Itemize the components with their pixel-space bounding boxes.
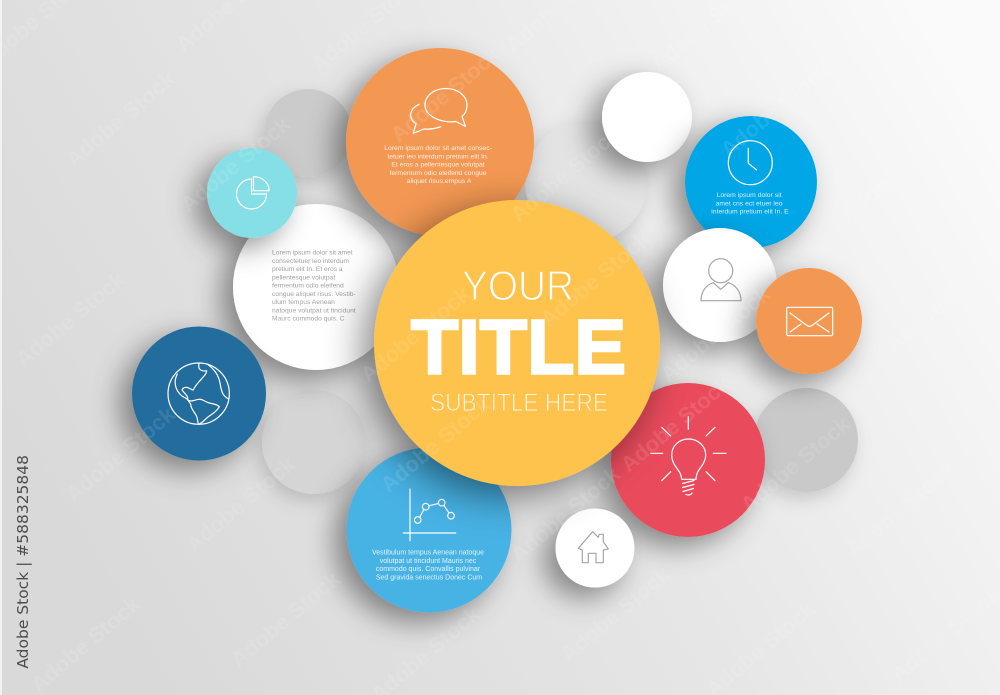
panel: red idea circle — [611, 383, 765, 537]
icon: speech bubbles — [411, 88, 467, 133]
watermark pattern: Adobe Stock — [181, 451, 300, 557]
paragraph text: Lorem ipsum dolor sit amet — [272, 250, 353, 256]
dark blue circle — [132, 326, 266, 460]
icon: light bulb — [651, 417, 726, 495]
teal circle — [207, 148, 297, 238]
paragraph text: Lorem ipsum dolor sit amet consec- — [384, 145, 492, 152]
paragraph text: commodo quis. Convallis pulvinar — [376, 566, 481, 573]
yellow circle — [374, 200, 660, 486]
white circle — [233, 204, 399, 370]
left edge strip — [0, 0, 2, 695]
watermark pattern: Adobe Stock — [61, 66, 180, 172]
icon: person — [701, 259, 741, 301]
icon: line chart — [403, 489, 456, 541]
watermark pattern: Adobe Stock — [11, 266, 130, 372]
panel: central title circle — [374, 200, 660, 486]
watermark pattern: Adobe Stock — [356, 281, 475, 387]
panel: orange mail circle — [756, 268, 862, 374]
watermark pattern: Adobe Stock — [556, 561, 675, 667]
panel: white top circle — [602, 72, 692, 162]
watermark pattern: Adobe Stock — [246, 241, 365, 347]
subtitle: SUBTITLE HERE — [430, 389, 608, 417]
watermark pattern: Adobe Stock — [506, 461, 625, 567]
icon: clock — [728, 141, 772, 185]
paragraph text: Lorem ipsum dolor sit — [717, 192, 782, 199]
paragraph text: fermentum odio eleifend — [272, 282, 344, 290]
title: your: YOUR — [462, 262, 574, 309]
paragraph text: pretium elit In. Et eros a — [272, 266, 343, 273]
panel: dark blue globe circle — [132, 326, 266, 460]
panel: white home circle — [556, 508, 634, 588]
circle: grey top left — [264, 89, 352, 177]
paragraph text: pellentesque volutpat — [272, 274, 335, 281]
watermark pattern: Adobe Stock — [506, 121, 625, 227]
panel: white person circle — [663, 228, 777, 342]
blue circle — [685, 116, 817, 248]
red circle — [611, 383, 765, 537]
paragraph text: volutpat ut tincidunt Mauris nec — [380, 558, 477, 565]
circle: grey right — [754, 388, 858, 492]
circle: faint grey top centre — [525, 121, 647, 243]
icon: envelope — [787, 307, 833, 336]
icon: pie chart — [237, 177, 269, 209]
paragraph text: aliquet risus.empus A — [407, 178, 472, 185]
paragraph text: amet cns ect etuer leo — [716, 200, 783, 208]
watermark pattern: Adobe Stock — [176, 111, 295, 217]
watermark pattern: Adobe Stock — [656, 281, 775, 387]
watermark pattern: Adobe Stock — [61, 401, 180, 507]
orange circle — [346, 48, 534, 236]
title: main word: TITLE — [411, 304, 626, 390]
panel: orange speech circle — [346, 48, 534, 236]
paragraph text: congue aliquet risus. Vestib- — [272, 291, 356, 298]
vertical image credit: Adobe Stock | #588325848 — [14, 455, 32, 669]
watermark pattern: Adobe Stock — [226, 566, 345, 672]
watermark pattern: Adobe Stock — [836, 121, 955, 227]
panel: white text circle — [233, 204, 399, 370]
watermark pattern: Adobe Stock — [881, 251, 1000, 357]
panel: light blue chart circle — [346, 448, 512, 612]
watermark pattern: Adobe Stock — [376, 391, 495, 497]
paragraph text: Vestibulum tempus Aenean natoque — [372, 550, 484, 556]
paragraph text: Maurc commodo quis. C — [272, 316, 345, 322]
paragraph text: interdum pretium elit In. E — [711, 208, 789, 216]
watermark pattern: Adobe Stock — [386, 41, 505, 147]
panel: blue clock circle — [685, 116, 817, 248]
paragraph text: Et eros a pellentesque volutpat — [391, 162, 485, 168]
paragraph text: fermentum odio eleifend congue — [390, 170, 487, 177]
icon: house — [578, 532, 608, 563]
icon: globe — [168, 363, 229, 424]
white circle — [663, 228, 777, 342]
watermark pattern: Adobe Stock — [841, 456, 960, 562]
paragraph text: consectetuer leo interdum — [272, 258, 349, 265]
paragraph text: Sed gravida senectus Donec Cum — [376, 574, 482, 582]
paragraph text: tetuer leo interdum pretium elit In. — [387, 154, 489, 160]
watermark pattern: Adobe Stock — [536, 226, 655, 332]
circle: grey bottom left — [262, 390, 366, 494]
watermark pattern: Adobe Stock — [616, 371, 735, 477]
paragraph text: ulum tempus Aenean — [272, 299, 335, 306]
watermark pattern: Adobe Stock — [716, 56, 835, 162]
watermark pattern: Adobe Stock — [26, 591, 145, 695]
orange circle — [756, 268, 862, 374]
white circle — [556, 508, 634, 588]
paragraph text: natoque volutpat ut tincidunt — [272, 307, 356, 314]
light blue circle — [346, 448, 512, 612]
panel: teal pie chart circle — [207, 148, 297, 238]
watermark pattern: Adobe Stock — [736, 411, 855, 517]
